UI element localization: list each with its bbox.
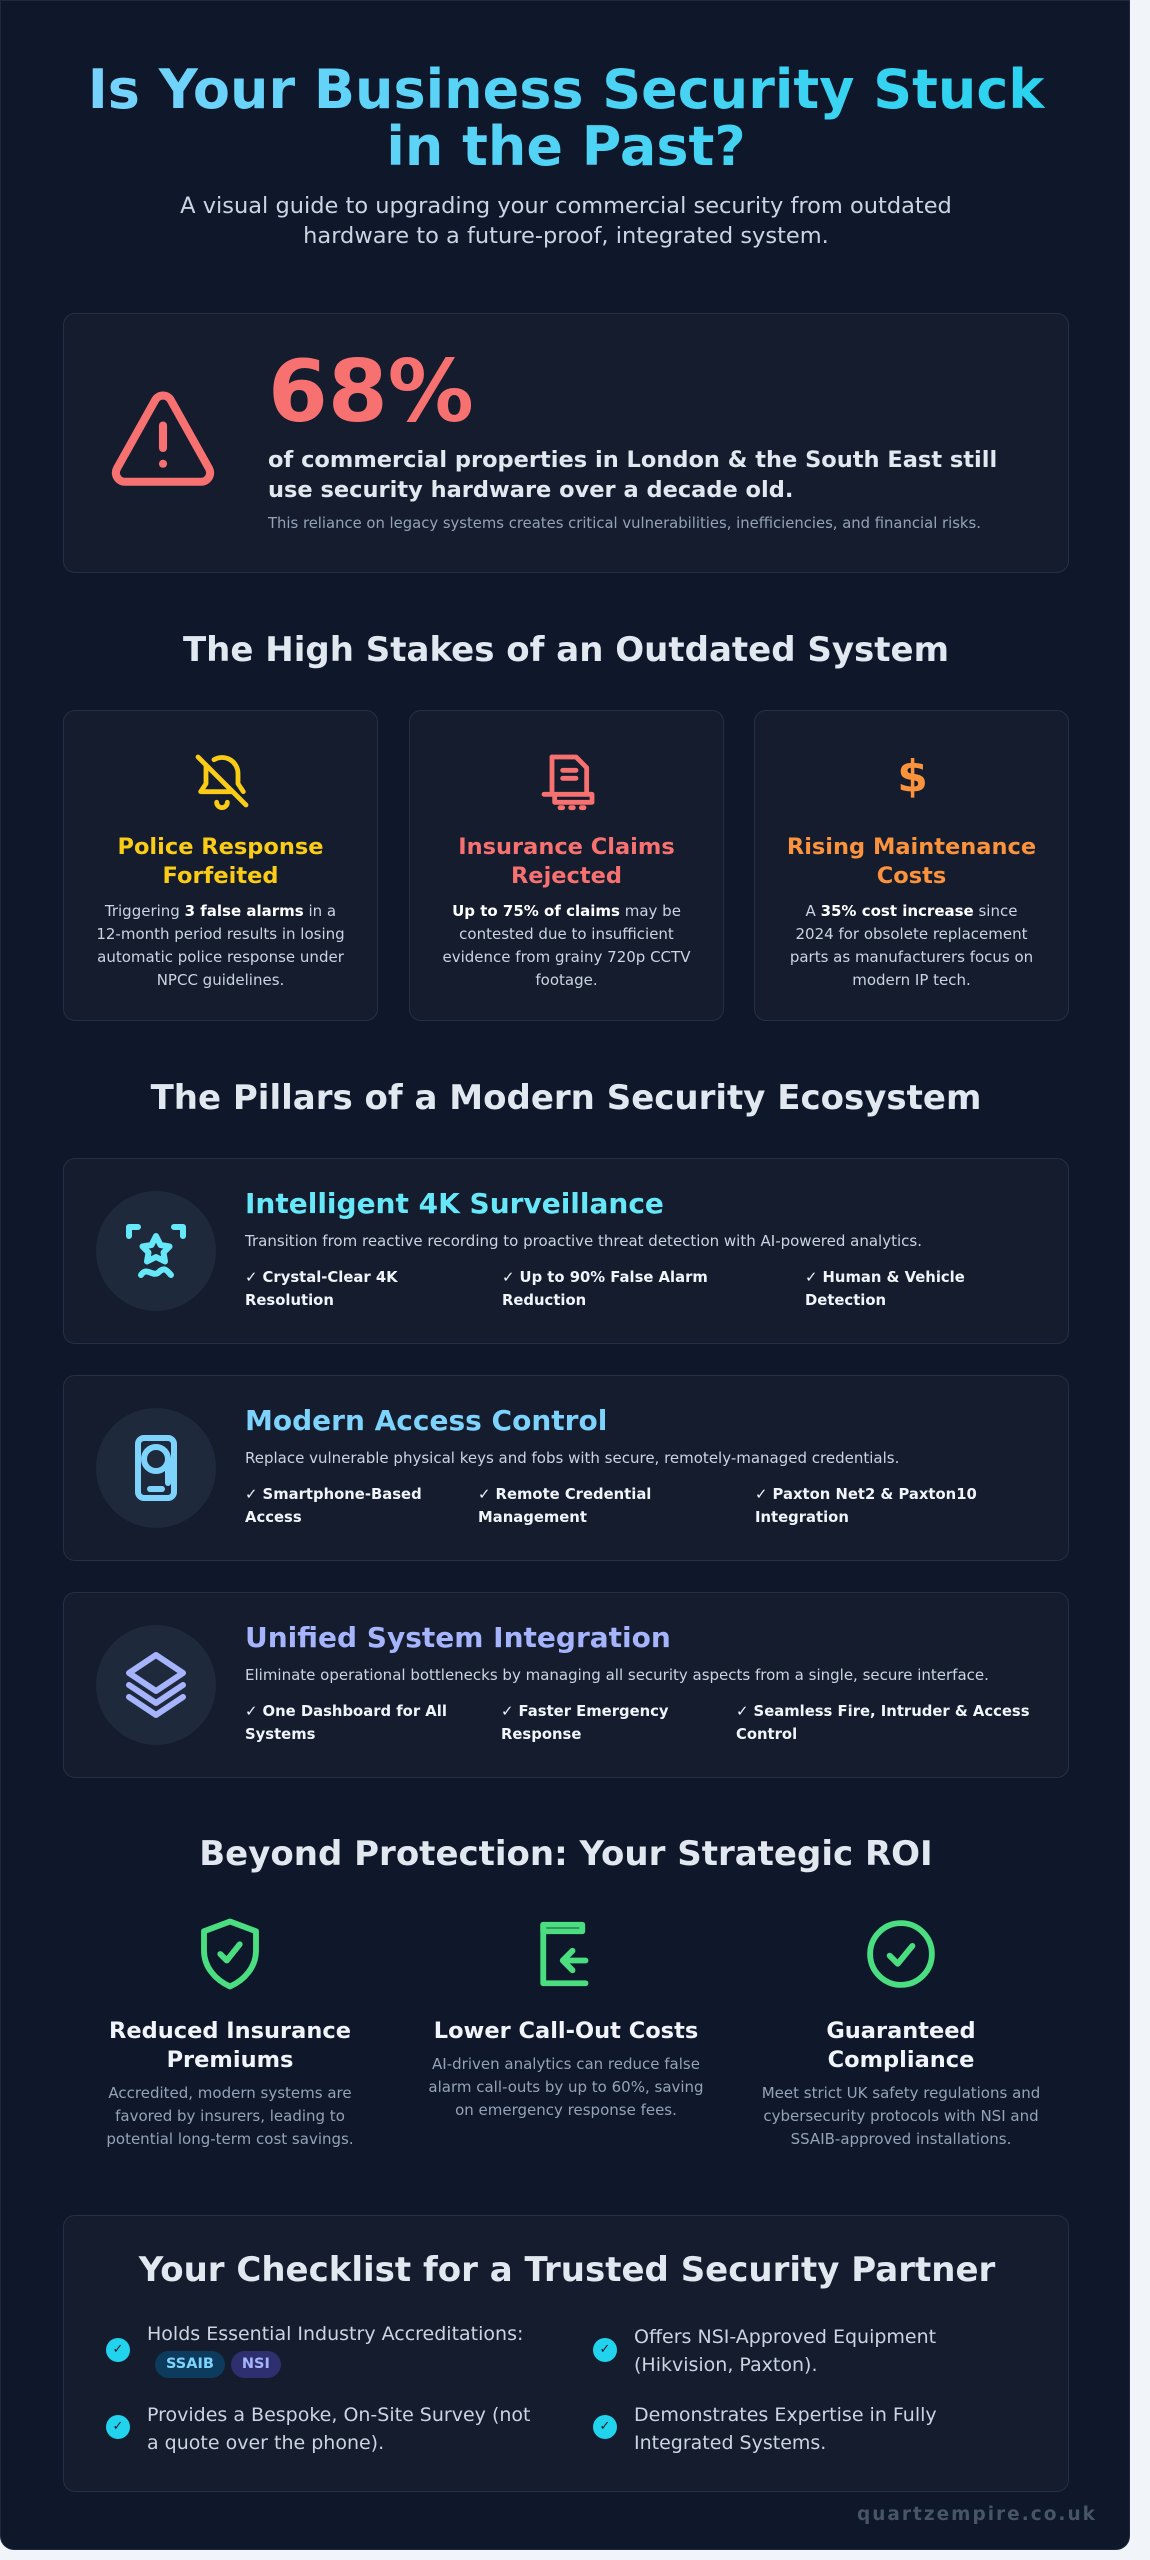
card text: parts as manufacturers focus on	[790, 948, 1033, 966]
pillar title: Modern Access Control	[245, 1404, 607, 1437]
card text: Up to 75% of claims may be	[452, 902, 681, 920]
title: Is Your Business Security Stuck	[88, 58, 1044, 121]
panel: surveillance: Detection	[805, 1292, 886, 1309]
card text: A 35% cost increase since	[806, 902, 1017, 920]
card text: 12-month period results in losing	[96, 925, 345, 943]
panel: access control: ✓ Paxton Net2 & Paxton10	[755, 1486, 977, 1503]
item 4	[593, 2415, 617, 2439]
icon: bell off	[196, 754, 248, 810]
pillar text: Transition from reactive recording to proactive threat detection with AI-powered analytics.	[245, 1232, 922, 1250]
ROI: insurance: Accredited, modern systems are favored by insurers, leading to potential long-term cost savings.	[106, 2084, 354, 2148]
panel: integration: Control	[736, 1726, 797, 1743]
checklist heading: Your Checklist for a Trusted Security Partner	[139, 2250, 995, 2290]
panel: access control: Management	[478, 1509, 587, 1526]
icon: layers	[96, 1625, 216, 1745]
stat text: of commercial properties in London & the South East still	[268, 447, 997, 473]
features	[245, 1269, 398, 1309]
item 3	[593, 2338, 617, 2362]
heading: ROI: Beyond Protection: Your Strategic ROI	[199, 1834, 933, 1874]
card title: Insurance Claims	[458, 834, 675, 860]
features: Resolution	[245, 1292, 334, 1309]
stat text: use security hardware over a decade old.	[268, 477, 793, 503]
ROI: compliance: Meet strict UK safety regulations and cybersecurity protocols with NSI and SSAIB-approved installations.	[762, 2084, 1040, 2148]
card text: contested due to insufficient	[459, 925, 674, 943]
item 1: ✓	[113, 2342, 123, 2357]
panel: maintenance	[754, 710, 1069, 1021]
ROI: call-out	[428, 1922, 704, 2119]
features: ✓ Crystal-Clear 4K	[245, 1269, 398, 1286]
item 2: ✓	[113, 2419, 123, 2434]
ROI: insurance: Reduced Insurance	[109, 2018, 351, 2044]
card title: Costs	[877, 863, 946, 889]
card text: 2024 for obsolete replacement	[796, 925, 1027, 943]
item 4: ✓	[600, 2419, 610, 2434]
card text	[96, 902, 345, 989]
card text: NPCC guidelines.	[157, 971, 284, 989]
panel: integration: ✓ Seamless Fire, Intruder & Access	[736, 1703, 1030, 1720]
panel: access control: ✓ Remote Credential	[478, 1486, 651, 1503]
pillar title: Intelligent 4K Surveillance	[245, 1187, 664, 1220]
panel: surveillance: ✓ Up to 90% False Alarm	[502, 1269, 708, 1286]
panel: integration: ✓ Faster Emergency	[501, 1703, 669, 1720]
stat note: This reliance on legacy systems creates critical vulnerabilities, inefficiencies, and financial risks.	[268, 515, 981, 532]
icon: AI scan	[96, 1191, 216, 1311]
footer: site name: quartzempire.co.uk	[857, 2504, 1097, 2525]
card text: modern IP tech.	[852, 971, 971, 989]
panel: surveillance: ✓ Human & Vehicle	[805, 1269, 965, 1286]
ROI: compliance: Compliance	[828, 2047, 974, 2073]
panel: integration	[63, 1592, 1069, 1778]
panel: police response	[63, 710, 378, 1021]
panel: access control: Integration	[755, 1509, 849, 1526]
panel: surveillance	[63, 1158, 1069, 1344]
card title	[787, 834, 1036, 889]
icon: check circle	[867, 1920, 935, 1988]
panel: key statistic	[63, 313, 1069, 573]
card text: automatic police response under	[97, 948, 344, 966]
item 2	[106, 2415, 130, 2439]
subtitle: A visual guide to upgrading your commercial security from outdated	[180, 193, 952, 219]
panel: checklist: Integrated Systems.	[634, 2432, 826, 2454]
stat number: 68%	[268, 342, 474, 442]
item 3: ✓	[600, 2342, 610, 2357]
ROI: compliance	[762, 1920, 1040, 2148]
pillar title: Unified System Integration	[245, 1621, 671, 1654]
icon: rejected claim	[542, 754, 594, 810]
card text: Triggering 3 false alarms in a	[105, 902, 336, 920]
panel: checklist: Demonstrates Expertise in Fully	[634, 2404, 937, 2426]
stat text	[268, 447, 997, 503]
card text: footage.	[535, 971, 598, 989]
panel: integration: Response	[501, 1726, 581, 1743]
features: ✓ Smartphone-Based	[245, 1486, 422, 1503]
pillar text: Replace vulnerable physical keys and fobs with secure, remotely-managed credentials.	[245, 1449, 899, 1467]
icon: phone	[96, 1408, 216, 1528]
card text	[790, 902, 1033, 989]
subtitle: hardware to a future-proof, integrated system.	[303, 223, 829, 249]
heading: pillars: The Pillars of a Modern Security Ecosystem	[151, 1078, 981, 1118]
card title	[458, 834, 675, 889]
icon: wallet arrow	[540, 1922, 588, 1986]
title: in the Past?	[386, 115, 746, 178]
ROI: insurance: Premiums	[167, 2047, 293, 2073]
features	[245, 1486, 422, 1526]
card title: Rising Maintenance	[787, 834, 1036, 860]
card title: Rejected	[511, 863, 622, 889]
ROI: insurance	[106, 1918, 354, 2148]
panel: checklist: SSAIB	[166, 2356, 214, 2372]
panel: surveillance: Reduction	[502, 1292, 586, 1309]
card text: evidence from grainy 720p CCTV	[443, 948, 690, 966]
panel: insurance	[409, 710, 724, 1021]
icon: shield check	[201, 1918, 259, 1990]
features: Access	[245, 1509, 302, 1526]
icon: warning triangle	[112, 392, 214, 486]
card text	[443, 902, 690, 989]
panel: checklist: Offers NSI-Approved Equipment	[634, 2326, 936, 2348]
pillar text: Eliminate operational bottlenecks by managing all security aspects from a single, secure interface.	[245, 1666, 989, 1684]
features: ✓ One Dashboard for All	[245, 1703, 447, 1720]
card title: Police Response	[117, 834, 324, 860]
card title	[117, 834, 324, 889]
subtitle	[180, 193, 952, 249]
panel: checklist: Provides a Bespoke, On-Site Survey (not	[147, 2404, 530, 2426]
panel: checklist	[63, 2215, 1069, 2492]
heading: high stakes: The High Stakes of an Outdated System	[183, 630, 949, 670]
panel: checklist: Holds Essential Industry Accreditations:	[147, 2323, 523, 2345]
ROI: call-out: Lower Call-Out Costs	[434, 2018, 698, 2044]
ROI: call-out: AI-driven analytics can reduce false alarm call-outs by up to 60%, saving on emergency response fees.	[428, 2055, 704, 2119]
card title: Forfeited	[163, 863, 278, 889]
title	[1, 61, 1131, 175]
panel: checklist: a quote over the phone).	[147, 2432, 384, 2454]
panel: access control	[63, 1375, 1069, 1561]
panel: checklist: (Hikvision, Paxton).	[634, 2354, 818, 2376]
panel: checklist: NSI	[242, 2356, 270, 2372]
ROI: compliance: Guaranteed	[826, 2018, 976, 2044]
item 1	[106, 2338, 130, 2362]
features	[245, 1703, 447, 1743]
icon: dollar: $	[897, 751, 928, 802]
features: Systems	[245, 1726, 315, 1743]
